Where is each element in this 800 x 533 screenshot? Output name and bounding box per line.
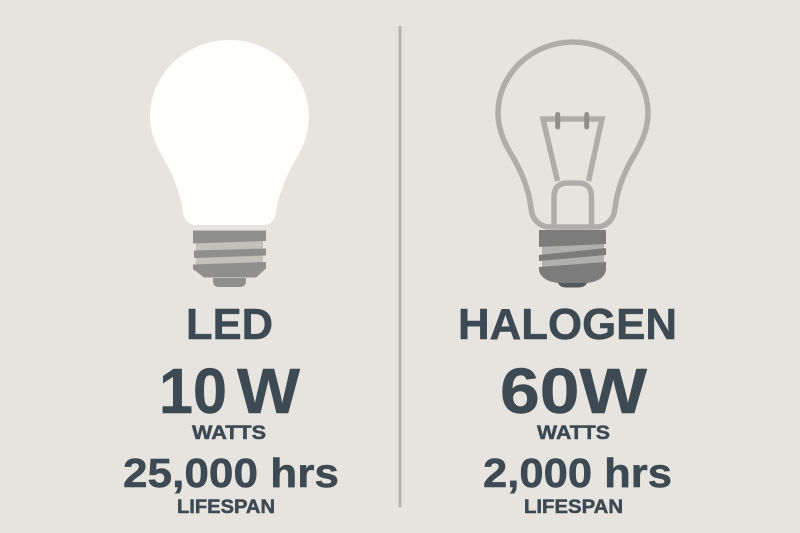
LED wattage: 10 [159, 355, 227, 427]
panel: halogen [458, 42, 677, 518]
LED wattage [159, 355, 301, 427]
LED lifespan label: LIFESPAN [177, 496, 275, 518]
halogen filament support [543, 119, 602, 181]
halogen heading: HALOGEN [458, 300, 677, 349]
LED lifespan value: 25,000 hrs [123, 450, 339, 496]
halogen lifespan value: 2,000 hrs [483, 450, 672, 496]
icon: halogen bulb [498, 42, 648, 288]
LED watts label: WATTS [192, 422, 266, 444]
LED glass [150, 40, 309, 225]
LED screw base [193, 230, 266, 287]
icon: LED bulb [150, 40, 309, 287]
halogen glass outline [498, 42, 648, 227]
halogen watts label: WATTS [537, 422, 610, 444]
LED heading: LED [186, 300, 273, 349]
panel: LED [123, 40, 339, 518]
halogen filament prongs [558, 114, 587, 127]
halogen wattage: 60W [500, 355, 648, 427]
LED wattage: W [237, 355, 301, 427]
halogen lifespan label: LIFESPAN [524, 496, 623, 518]
halogen screw base [539, 230, 606, 288]
halogen stem [554, 183, 592, 227]
